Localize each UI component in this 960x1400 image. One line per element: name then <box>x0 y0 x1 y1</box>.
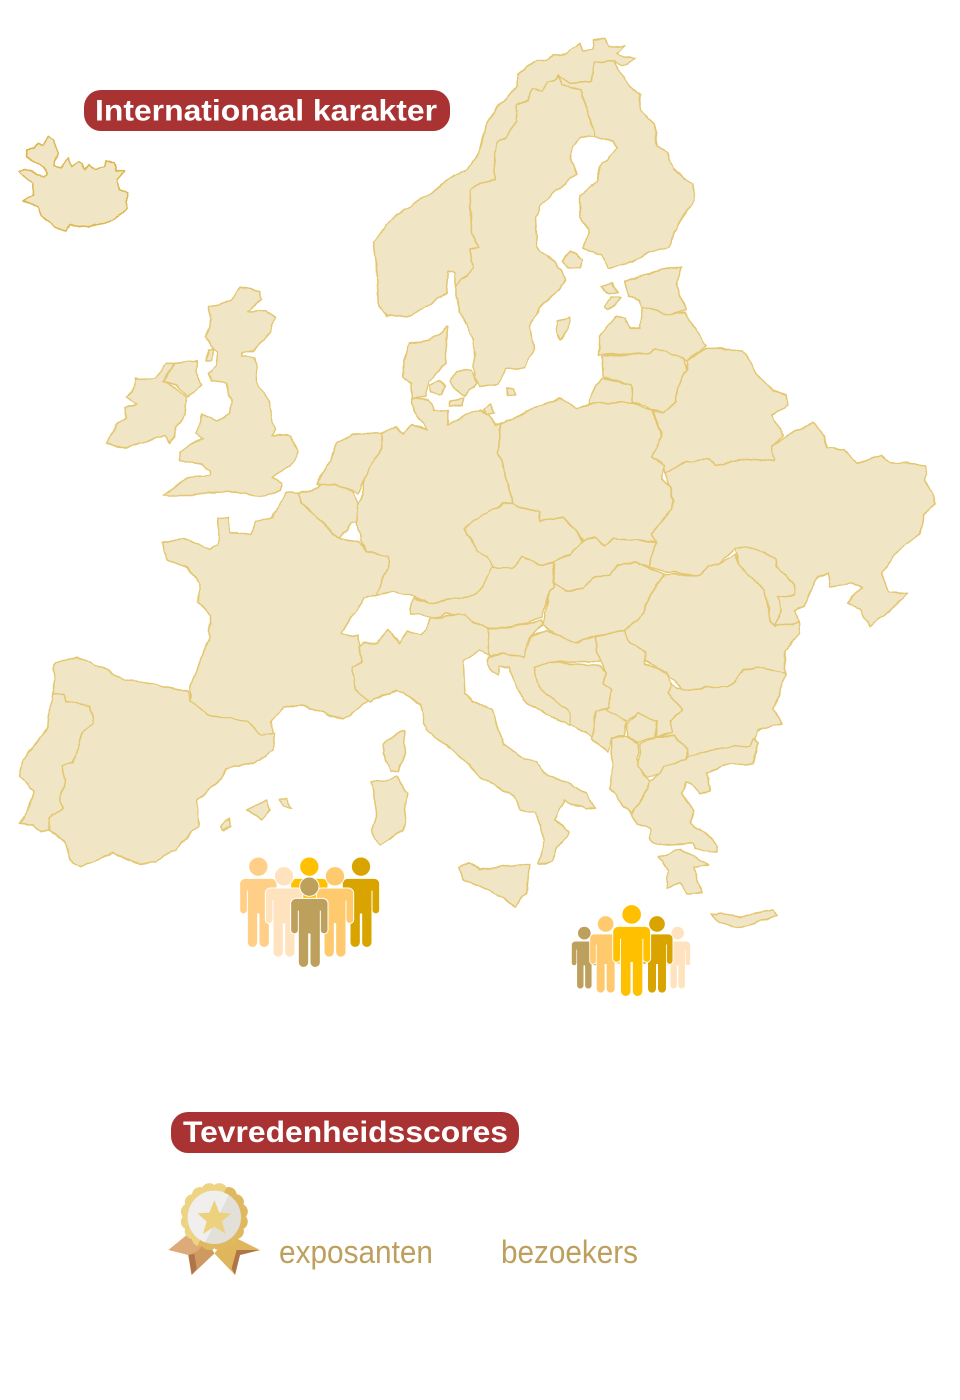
Romania <box>623 555 800 690</box>
Czech Republic <box>465 503 582 568</box>
Zealand <box>450 370 477 397</box>
map: eastern and south-eastern Europe <box>410 423 937 927</box>
Funen <box>430 380 445 395</box>
Portugal <box>20 693 93 832</box>
Bosnia and Herzegovina <box>533 662 612 737</box>
Sardinia <box>372 777 408 845</box>
icon: medal with star <box>168 1183 260 1275</box>
Slovakia <box>553 537 657 592</box>
map: western and central Europe <box>20 398 595 867</box>
Norway <box>374 40 635 317</box>
Moldova <box>735 548 795 627</box>
Greece <box>631 738 758 852</box>
Bulgaria <box>657 667 785 757</box>
Slovenia <box>488 620 543 658</box>
Ibiza <box>221 818 231 830</box>
Latvia <box>598 307 707 360</box>
Spain <box>50 657 275 867</box>
Croatia <box>487 630 600 725</box>
icon: group of six people <box>240 857 380 967</box>
Mallorca <box>247 800 270 819</box>
Saaremaa <box>602 283 618 293</box>
map: north-west countries <box>18 40 635 496</box>
heading: Tevredenheidsscores: Tevredenheidsscores <box>183 1116 508 1149</box>
Montenegro <box>592 708 627 753</box>
map of Europe <box>18 40 937 927</box>
Austria <box>410 557 554 628</box>
Hiiumaa <box>605 297 622 310</box>
heading: Internationaal karakter: Internationaal karakter <box>95 94 437 128</box>
Sweden <box>455 75 595 387</box>
Northern Ireland <box>163 361 202 396</box>
Belarus <box>652 348 788 473</box>
Serbia <box>595 632 682 737</box>
Rugen <box>483 405 495 415</box>
Iceland <box>18 137 127 232</box>
Kosovo <box>627 713 657 742</box>
Denmark <box>403 327 448 398</box>
Hungary <box>543 563 665 643</box>
Peloponnese <box>658 848 708 893</box>
Crete <box>711 909 778 927</box>
Ukraine <box>648 423 937 627</box>
Gotland <box>556 317 569 340</box>
Kaliningrad <box>588 378 633 403</box>
Germany <box>357 398 513 603</box>
Finland <box>558 61 693 268</box>
Lolland <box>450 398 463 407</box>
Ireland <box>107 363 187 447</box>
label: exposanten: exposanten <box>279 1234 433 1270</box>
Corsica <box>383 730 405 772</box>
Lithuania <box>602 348 687 412</box>
Poland <box>498 398 673 547</box>
Estonia <box>624 266 686 315</box>
Menorca <box>278 798 292 808</box>
Aland <box>563 252 582 268</box>
France <box>162 493 388 735</box>
Netherlands <box>317 433 382 493</box>
Sicily <box>460 863 529 907</box>
North Macedonia <box>638 737 687 777</box>
label: bezoekers: bezoekers <box>501 1234 638 1270</box>
Bornholm <box>506 388 516 395</box>
Belgium <box>298 483 358 538</box>
Italy <box>352 613 595 865</box>
Scottish island <box>205 348 213 360</box>
map: Scandinavia and Baltics <box>455 61 788 547</box>
Great Britain <box>163 287 299 496</box>
Albania <box>609 736 650 813</box>
icon: group of five people <box>571 905 691 997</box>
